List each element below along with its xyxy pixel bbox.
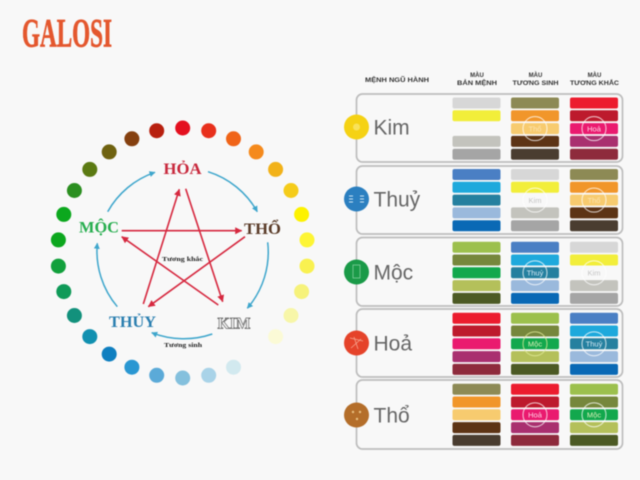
label: Tương sinh: Tương sinh — [164, 342, 202, 349]
swatches: Mộc generating colours (Thuỷ) — [511, 242, 559, 304]
panel: Thổ row — [344, 380, 622, 449]
label: Tương khắc: Tương khắc — [162, 256, 203, 263]
swatches: Mộc own colours — [452, 242, 500, 304]
swatches: Thuỷ generating colours (Kim): Kim — [529, 196, 541, 205]
name: Kim: Kim — [374, 116, 410, 140]
name: Thổ: Thổ — [374, 404, 410, 428]
element label: Thủy: THỦY — [109, 312, 156, 331]
logo: GALOSI: GALOSI — [22, 10, 112, 56]
swatches: Thuỷ overcoming colours (Thổ) — [570, 169, 618, 231]
swatches: Hoả own colours — [452, 313, 500, 375]
swatches: Thuỷ own colours — [452, 169, 500, 231]
panel: Hoả row — [344, 309, 622, 377]
generating cycle arrows (blue arcs) — [97, 172, 268, 339]
icon: Hoả — [344, 330, 369, 356]
table headers — [365, 72, 620, 87]
element label: Mộc: MỘC — [79, 219, 119, 237]
panel: Thuỷ row — [344, 166, 622, 234]
element label: Kim: KIM — [218, 316, 250, 332]
panel: Mộc row — [344, 238, 622, 306]
icon: Thuỷ — [344, 186, 369, 212]
icon: Kim — [344, 114, 369, 140]
table headers: MÀU — [588, 72, 601, 79]
swatches: Mộc overcoming colours (Kim): Kim — [588, 268, 600, 278]
swatches: Thổ generating colours (Hoả): Hoả — [528, 410, 543, 420]
table headers: BẢN MỆNH — [457, 79, 497, 87]
swatches: Kim generating colours (Thổ): Thổ — [529, 124, 541, 133]
icon: Thổ — [344, 402, 369, 428]
swatches: Hoả generating colours (Mộc): Mộc — [528, 340, 542, 348]
element label: Hỏa: HỎA — [164, 159, 202, 178]
swatches: Thổ overcoming colours (Mộc) — [570, 384, 618, 446]
swatches: Hoả overcoming colours (Thuỷ): Thuỷ — [586, 340, 603, 348]
element label: Thổ: THỔ — [244, 218, 281, 238]
swatches: Thuỷ overcoming colours (Thổ): Thổ — [588, 196, 600, 205]
table headers: TƯƠNG SINH — [512, 81, 558, 87]
overcoming cycle arrows (red star) — [122, 189, 245, 307]
icon: Mộc — [344, 260, 369, 284]
name: Mộc: Mộc — [374, 262, 413, 284]
panel: Kim row — [344, 94, 622, 162]
name: Thuỷ: Thuỷ — [374, 188, 421, 212]
swatches: Kim generating colours (Thổ) — [511, 98, 559, 160]
colour wheel of dots — [51, 120, 315, 386]
name: Hoả: Hoả — [374, 332, 412, 356]
swatches: Hoả generating colours (Mộc) — [511, 313, 559, 375]
swatches: Mộc generating colours (Thuỷ): Thuỷ — [527, 268, 544, 278]
table headers: TƯƠNG KHẮC — [570, 79, 620, 87]
swatches: Thổ overcoming colours (Mộc): Mộc — [587, 410, 601, 420]
swatches: Hoả overcoming colours (Thuỷ) — [570, 313, 618, 375]
swatches: Thổ generating colours (Hoả) — [511, 384, 559, 446]
table headers: MÀU — [470, 72, 484, 79]
table headers: MỆNH NGŨ HÀNH — [365, 76, 429, 84]
table headers: MÀU — [529, 72, 542, 79]
swatches: Thổ own colours — [452, 384, 500, 446]
swatches: Kim own colours — [452, 98, 500, 160]
swatches: Kim overcoming colours (Hoả) — [570, 98, 618, 160]
swatches: Mộc overcoming colours (Kim) — [570, 242, 618, 304]
swatches: Kim overcoming colours (Hoả): Hoả — [587, 124, 602, 133]
swatches: Thuỷ generating colours (Kim) — [511, 169, 559, 231]
